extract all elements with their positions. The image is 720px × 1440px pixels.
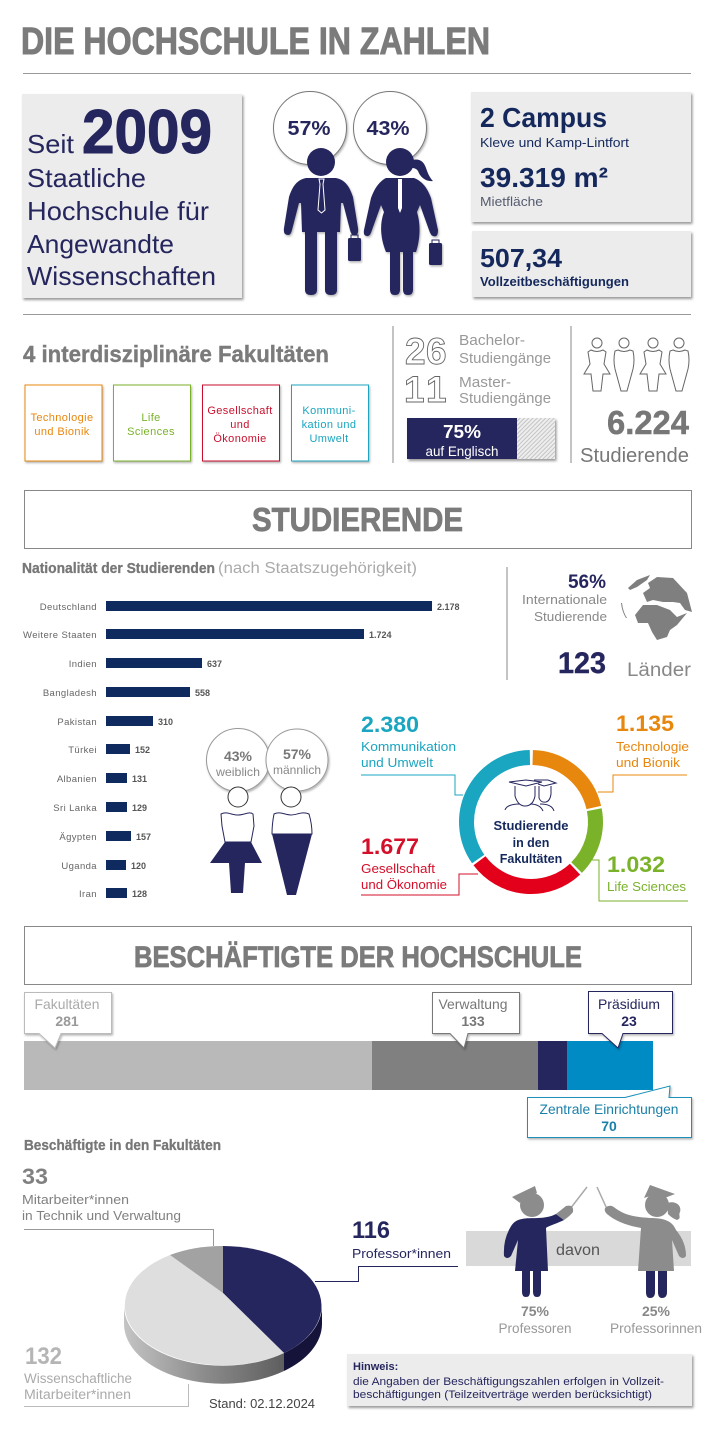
bar chart: nationality: 152 <box>135 745 150 755</box>
label: technical staff: 33 <box>22 1164 48 1189</box>
stat: international students: Internationale <box>522 592 607 607</box>
box: society: Ökonomie <box>213 433 267 445</box>
box: technology: Technologie <box>30 412 94 424</box>
stat: countries <box>558 647 692 681</box>
callout: presidium: 23 <box>621 1013 637 1029</box>
bar chart: nationality: Indien <box>69 659 97 670</box>
box: society: Gesellschaft <box>207 405 273 417</box>
panel: campus and rent area: Mietfläche <box>480 194 543 209</box>
bar chart: nationality: Sri Lanka <box>53 803 97 814</box>
stat: countries: Länder <box>627 660 692 681</box>
band: davon <box>466 1231 691 1266</box>
icon: male student: 57% <box>283 746 312 762</box>
label: technical staff <box>22 1164 214 1246</box>
label: male professors share: Professoren <box>498 1320 572 1336</box>
panel: campus and rent area: 39.319 m² <box>480 162 608 193</box>
callout: administration: 133 <box>461 1013 485 1029</box>
study programmes: Studiengänge <box>459 391 551 407</box>
section heading: employees <box>24 926 692 984</box>
label: female professors share: 25% <box>642 1303 671 1319</box>
bar chart: nationality: Deutschland <box>40 602 97 613</box>
box: communication <box>292 385 368 461</box>
box: technology <box>25 385 102 461</box>
pie slice: professors <box>223 1246 321 1353</box>
bar chart: nationality: 558 <box>195 688 210 698</box>
segment: life sciences <box>577 810 595 868</box>
label: communication: 2.380 <box>361 712 419 737</box>
donut chart: students by faculty <box>467 758 595 887</box>
stacked bar: employees <box>24 1041 653 1090</box>
box: technology: und Bionik <box>34 426 90 438</box>
panel: seit 2009: Hochschule für <box>27 196 209 226</box>
bar chart: nationality: Pakistan <box>57 717 97 728</box>
bar chart: nationality: Ägypten <box>59 832 97 843</box>
callout: administration: Verwaltung <box>438 996 508 1012</box>
bar chart: nationality: 157 <box>136 832 151 842</box>
icon: globe <box>621 575 692 640</box>
callout: faculties <box>24 992 112 1048</box>
icon: four student outlines <box>584 338 689 391</box>
callout: presidium: Präsidium <box>598 996 660 1012</box>
box: society <box>202 385 280 461</box>
bar chart: nationality <box>23 601 460 900</box>
study programmes: Master- <box>459 375 511 391</box>
bar chart: nationality: 128 <box>132 889 147 899</box>
label: communication <box>361 712 463 795</box>
bar: 75 percent in English <box>407 418 555 459</box>
pie side: navy <box>284 1306 322 1371</box>
label: society: Gesellschaft <box>361 861 435 876</box>
chart heading: nationality: (nach Staatszugehörigkeit) <box>218 560 417 577</box>
panel: seit 2009: Staatliche <box>27 163 146 193</box>
pie slice: scientific staff <box>125 1255 284 1365</box>
study programmes <box>404 331 551 410</box>
callout: central institutions <box>528 1086 692 1138</box>
study programmes: Studiengänge <box>459 351 551 367</box>
label: technology <box>598 711 689 792</box>
panel: seit 2009: Seit <box>27 129 75 159</box>
label: life sciences: Life Sciences <box>607 879 687 894</box>
study programmes: 11 <box>404 369 447 410</box>
stat: number of students: 6.224 <box>607 404 690 441</box>
gender share of students <box>206 728 328 895</box>
pie side: light <box>124 1306 284 1384</box>
box: communication: kation und <box>302 419 356 431</box>
label: society: 1.677 <box>361 834 419 859</box>
stat: number of students: Studierende <box>580 445 689 467</box>
bar chart: nationality: 120 <box>131 861 146 871</box>
panel: campus and rent area: 2 Campus <box>480 102 607 133</box>
bar chart: nationality: Uganda <box>61 861 97 872</box>
label: society <box>361 834 478 895</box>
icon: female student: weiblich <box>215 765 260 779</box>
bar chart: nationality: Bangladesh <box>43 688 97 699</box>
donut centre label: in den <box>513 836 549 850</box>
study programmes: Bachelor- <box>459 333 525 349</box>
bar chart: nationality: 131 <box>132 774 147 784</box>
callout: administration <box>432 992 520 1048</box>
bar chart: nationality: 310 <box>158 717 173 727</box>
note panel <box>347 1354 692 1406</box>
label: society: und Ökonomie <box>361 877 447 892</box>
panel: seit 2009: 2009 <box>82 98 212 167</box>
bar chart: nationality: 637 <box>207 659 222 669</box>
pie slice: technical staff <box>170 1246 223 1293</box>
note panel: die Angaben der Beschäftigungszahlen erfolgen in Vollzeit- <box>353 1376 664 1388</box>
stat: international students: Studierende <box>534 609 607 624</box>
date stamp: Stand: 02.12.2024 <box>209 1396 315 1411</box>
chart heading: nationality <box>22 560 417 577</box>
label: professors <box>315 1217 458 1282</box>
label: scientific staff: Mitarbeiter*innen <box>24 1387 131 1402</box>
band: davon: davon <box>556 1242 600 1259</box>
box: communication: Kommuni- <box>302 405 356 417</box>
panel: seit 2009: Wissenschaften <box>27 261 216 291</box>
bar chart: nationality: Iran <box>79 889 97 900</box>
box: society: und <box>230 419 250 431</box>
heading: employees in faculties: Beschäftigte in den Fakultäten <box>24 1137 221 1154</box>
box: life sciences: Sciences <box>127 426 175 438</box>
bar chart: nationality: 1.724 <box>369 630 392 640</box>
box: life sciences <box>114 385 190 461</box>
chart heading: nationality: Nationalität der Studierenden <box>22 560 215 577</box>
bar chart: nationality: 2.178 <box>437 602 460 612</box>
bar chart: nationality: 129 <box>132 803 147 813</box>
panel: campus and rent area <box>471 92 691 222</box>
label: scientific staff <box>24 1343 188 1406</box>
panel: full-time jobs: Vollzeitbeschäftigungen <box>480 274 629 289</box>
section heading: employees: BESCHÄFTIGTE DER HOCHSCHULE <box>134 941 582 974</box>
callout: faculties: Fakultäten <box>34 996 100 1012</box>
stat: international students: 56% <box>568 572 606 593</box>
label: female professors share: Professorinnen <box>610 1320 702 1336</box>
section heading: studierende <box>24 490 692 548</box>
bar: 75 percent in English: 75% <box>443 422 481 442</box>
label: professors: Professor*innen <box>352 1246 451 1261</box>
label: communication: Kommunikation <box>361 739 456 754</box>
label: communication: und Umwelt <box>361 755 433 770</box>
panel: faculty boxes <box>25 385 368 461</box>
label: male professors share: 75% <box>521 1303 550 1319</box>
label: scientific staff: 132 <box>25 1343 62 1370</box>
note panel: beschäftigungen (Teilzeitverträge werden berücksichtigt) <box>353 1389 652 1401</box>
callout: faculties: 281 <box>55 1013 79 1029</box>
label: scientific staff: Wissenschaftliche <box>24 1371 132 1386</box>
box: life sciences: Life <box>141 412 161 424</box>
panel: campus and rent area: Kleve und Kamp-Lintfort <box>480 135 629 150</box>
callout: central institutions: Zentrale Einrichtungen <box>540 1101 678 1117</box>
icon: male student: männlich <box>273 763 321 777</box>
label: technology: und Bionik <box>616 755 681 770</box>
label: technology: Technologie <box>616 739 689 754</box>
stat: countries: 123 <box>558 647 606 680</box>
icon: man 57%: 57% <box>288 118 331 140</box>
panel: full-time jobs <box>472 231 691 297</box>
icon: graduates <box>505 780 556 811</box>
study programmes: 26 <box>405 331 447 372</box>
icon: woman 43% <box>354 92 442 295</box>
donut centre label: Studierende <box>494 819 569 833</box>
section heading: studierende: STUDIERENDE <box>252 501 463 538</box>
label: technical staff: Mitarbeiter*innen <box>22 1192 129 1207</box>
bar chart: nationality: Weitere Staaten <box>23 630 97 641</box>
note panel: Hinweis: <box>353 1361 398 1373</box>
heading: faculties: 4 interdisziplinäre Fakultäten <box>23 341 329 367</box>
callout: central institutions: 70 <box>601 1118 617 1134</box>
segment: technology <box>533 758 594 808</box>
label: life sciences <box>592 852 688 901</box>
donut centre label: Fakultäten <box>500 852 562 866</box>
stat: international students <box>522 572 607 624</box>
stat: number of students <box>580 404 690 467</box>
label: technology: 1.135 <box>616 711 674 736</box>
box: communication: Umwelt <box>309 433 349 445</box>
bar: 75 percent in English: auf Englisch <box>426 443 498 459</box>
icon: female professor <box>597 1185 686 1298</box>
panel: seit 2009 <box>22 94 242 298</box>
segment: communication <box>467 758 530 859</box>
bar chart: nationality: Türkei <box>68 745 97 756</box>
label: professors: 116 <box>352 1217 390 1244</box>
icon: female student: 43% <box>224 748 253 764</box>
bar chart: nationality: Albanien <box>57 774 97 785</box>
label: female professors share <box>610 1303 702 1336</box>
gender figures: staff <box>274 92 442 295</box>
callout: presidium <box>588 992 672 1048</box>
icon: woman 43%: 43% <box>366 118 410 140</box>
icon: male student <box>266 729 328 895</box>
segment: society <box>480 861 575 887</box>
label: life sciences: 1.032 <box>607 852 665 877</box>
label: male professors share <box>498 1303 572 1336</box>
title: DIE HOCHSCHULE IN ZAHLEN <box>21 21 490 63</box>
donut centre label <box>494 819 569 866</box>
pie chart: faculty staff <box>124 1246 322 1384</box>
icon: man 57% <box>274 92 361 295</box>
label: technical staff: in Technik und Verwaltung <box>22 1208 181 1223</box>
icon: male professor <box>504 1186 587 1297</box>
panel: seit 2009: Angewandte <box>27 229 174 259</box>
icon: female student <box>206 728 270 893</box>
panel: full-time jobs: 507,34 <box>480 243 563 273</box>
